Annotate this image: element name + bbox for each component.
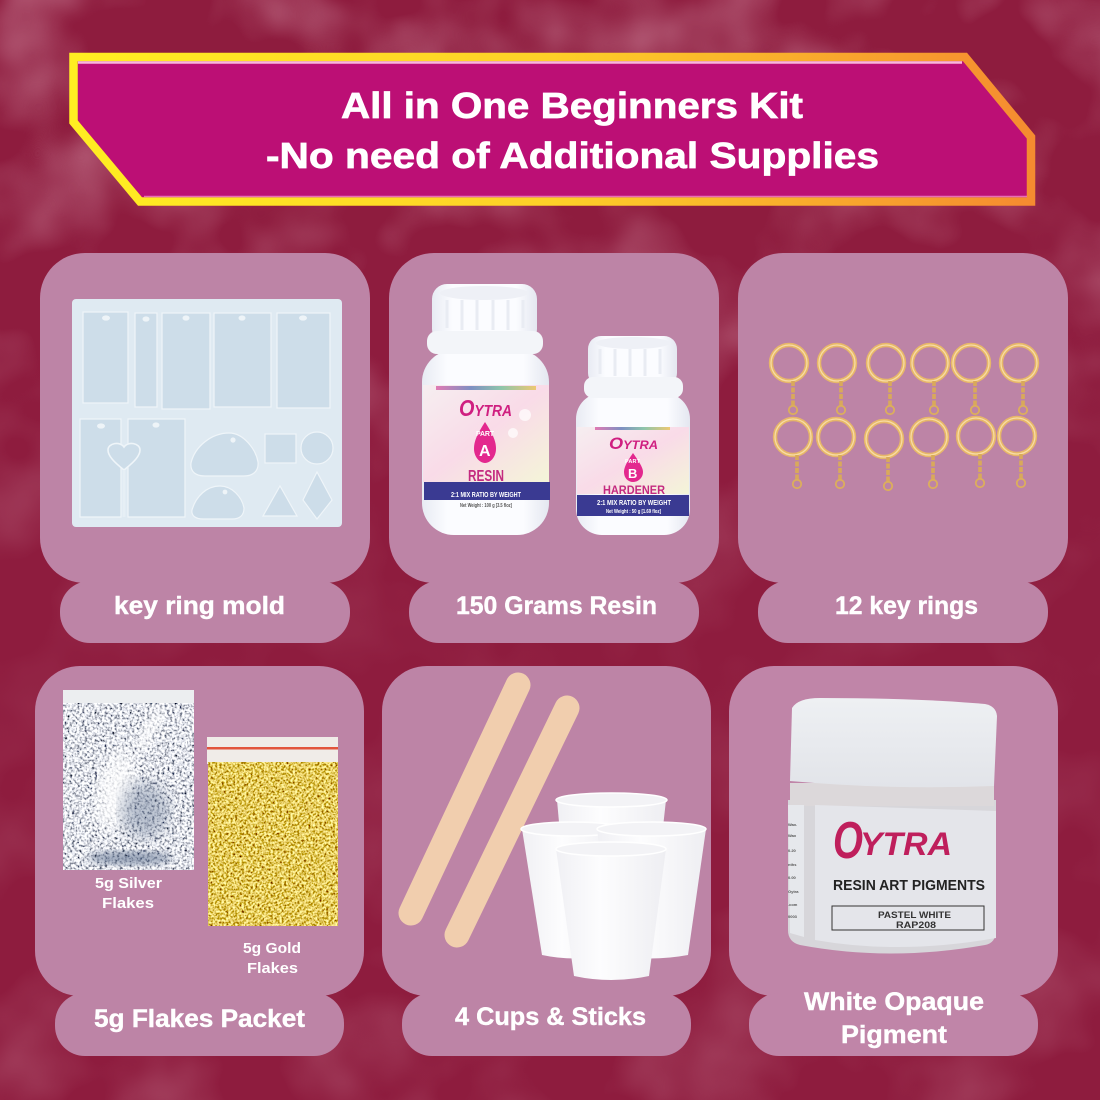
caption: silver flakes <box>95 876 162 912</box>
icon: paper cups <box>521 793 706 980</box>
jar side print: Oytra <box>788 889 799 894</box>
icon: hardener bottle part B: HARDENER <box>603 483 665 497</box>
panel: key rings <box>738 253 1068 643</box>
jar side print: .com <box>788 902 798 907</box>
jar side print: nths <box>788 862 797 867</box>
panel: pigment <box>729 666 1058 1056</box>
icon: resin bottle part A: PART <box>476 431 495 438</box>
panel: resin bottles <box>389 253 719 643</box>
icon: resin bottle part A: RESIN <box>468 468 504 485</box>
icon: resin bottle part A: A <box>479 443 491 460</box>
panel: flakes <box>35 666 364 1056</box>
jar side print: 0.00 <box>788 875 797 880</box>
icon: pigment jar: RAP208 <box>896 920 936 930</box>
label: 5g flakes packet: 5g Flakes Packet <box>94 1005 306 1033</box>
caption: gold flakes <box>243 941 301 977</box>
icon: resin bottle part A: 2:1 MIX RATIO BY WEIGHT <box>451 490 521 499</box>
caption: silver flakes: 5g Silver <box>95 876 162 892</box>
jar side print: 0003 <box>788 914 798 919</box>
icon: silver flakes packet <box>63 690 194 870</box>
caption: gold flakes: Flakes <box>247 961 298 977</box>
caption: silver flakes: Flakes <box>102 896 154 912</box>
icon: resin bottle part A: OYTRA <box>459 395 512 421</box>
label: 12 key rings: 12 key rings <box>835 592 978 620</box>
icon: hardener bottle part B: B <box>628 466 637 481</box>
icon: resin bottle part A: Net Weight : 100 g [3.5 floz] <box>460 503 512 509</box>
icon: wooden sticks <box>411 685 567 935</box>
label: 4 cups and sticks: 4 Cups & Sticks <box>455 1003 646 1031</box>
icon: resin bottle part A <box>422 284 550 535</box>
jar side print: Wax <box>788 833 797 838</box>
caption: gold flakes: 5g Gold <box>243 941 301 957</box>
icon: pigment jar: RESIN ART PIGMENTS <box>833 877 985 894</box>
icon: gold flakes packet <box>207 737 338 926</box>
panel: key ring mold <box>40 253 370 643</box>
icon: twelve gold key rings <box>771 345 1037 490</box>
icon: hardener bottle part B: Net Weight : 50 g [1.69 floz] <box>606 509 661 515</box>
label: white opaque pigment: Pigment <box>841 1021 948 1049</box>
icon: pigment jar: PASTEL WHITE <box>878 910 951 920</box>
label: white opaque pigment <box>804 988 984 1049</box>
jar side print: Wax. <box>788 822 797 827</box>
icon: hardener bottle part B: PART <box>625 459 641 465</box>
panel: cups and sticks <box>382 666 711 1056</box>
icon: pigment jar: O <box>833 812 863 870</box>
icon: silicone mold <box>72 299 342 527</box>
icon: hardener bottle part B: 2:1 MIX RATIO BY WEIGHT <box>597 500 672 507</box>
icon: hardener bottle part B <box>576 336 690 535</box>
title banner <box>74 57 1031 202</box>
title text: All in One Beginners Kit <box>341 85 803 126</box>
jar side print <box>788 822 799 919</box>
title text: -No need of Additional Supplies <box>266 135 879 176</box>
jar side print: 0.20 <box>788 848 797 853</box>
icon: hardener bottle part B: OYTRA <box>609 434 658 453</box>
title text <box>266 85 879 176</box>
icon: pigment jar <box>788 698 997 954</box>
label: 150 grams resin: 150 Grams Resin <box>456 592 657 620</box>
label: white opaque pigment: White Opaque <box>804 988 984 1016</box>
icon: pigment jar: YTRA <box>860 826 952 862</box>
label: key ring mold: key ring mold <box>114 592 285 620</box>
